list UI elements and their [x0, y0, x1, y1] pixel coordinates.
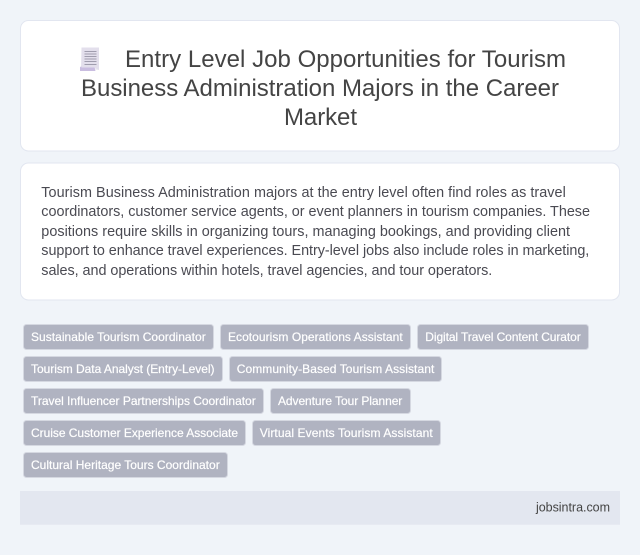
- footer brand text: jobsintra.com: [535, 500, 610, 514]
- tag: Cruise Customer Experience Associate: [24, 420, 246, 446]
- tag: Travel Influencer Partnerships Coordinator: Travel Influencer Partnerships Coordinator: [31, 394, 256, 408]
- tag: Cruise Customer Experience Associate: Cruise Customer Experience Associate: [31, 426, 238, 440]
- tag: Community-Based Tourism Assistant: Community-Based Tourism Assistant: [237, 362, 435, 376]
- tag: Tourism Data Analyst: [24, 356, 222, 382]
- tag: Sustainable Tourism Coordinator: [24, 324, 214, 350]
- tag list: [24, 324, 588, 478]
- tag: Virtual Events Tourism Assistant: Virtual Events Tourism Assistant: [260, 426, 433, 440]
- panel: title card: [20, 20, 620, 151]
- tag: Cultural Heritage Tours Coordinator: [24, 452, 228, 478]
- tag: Travel Influencer Partnerships Coordinator: [24, 388, 264, 414]
- description text: positions require skills in organizing tours, managing bookings, and providing client: [41, 224, 570, 240]
- description text: Tourism Business Administration majors at the entry level often find roles as travel: [41, 185, 566, 201]
- tag: Ecotourism Operations Assistant: Ecotourism Operations Assistant: [228, 330, 403, 344]
- description text: [41, 185, 590, 279]
- tag: Tourism Data Analyst: Tourism Data Analyst (Entry-Level): [31, 362, 214, 376]
- tag: Digital Travel Content Curator: Digital Travel Content Curator: [425, 330, 581, 344]
- title: Market: [284, 104, 357, 131]
- tag: Digital Travel Content Curator: [418, 324, 588, 350]
- description text: coordinators, customer service agents, or event planners in tourism companies. These: [41, 204, 590, 220]
- tag: Adventure Tour Planner: [270, 388, 410, 414]
- description text: support to enhance travel experiences. Entry-level jobs also include roles in marketing,: [41, 243, 589, 259]
- icon: document scroll: [80, 48, 99, 71]
- tag: Sustainable Tourism Coordinator: Sustainable Tourism Coordinator: [31, 330, 206, 344]
- title: Business Administration Majors in the Career: [81, 75, 559, 102]
- tag: Cultural Heritage Tours Coordinator: Cultural Heritage Tours Coordinator: [31, 458, 220, 472]
- footer bar: [20, 491, 620, 525]
- tag: Virtual Events Tourism Assistant: [252, 420, 440, 446]
- tag: Adventure Tour Planner: Adventure Tour Planner: [278, 394, 402, 408]
- description text: sales, and operations within hotels, travel agencies, and tour operators.: [41, 263, 492, 279]
- tag: Community-Based Tourism Assistant: [230, 356, 442, 382]
- title: Entry Level Job Opportunities for Tourism: [125, 46, 566, 73]
- tag: Ecotourism Operations Assistant: [220, 324, 410, 350]
- title: [81, 46, 566, 131]
- panel: description card: [20, 163, 620, 300]
